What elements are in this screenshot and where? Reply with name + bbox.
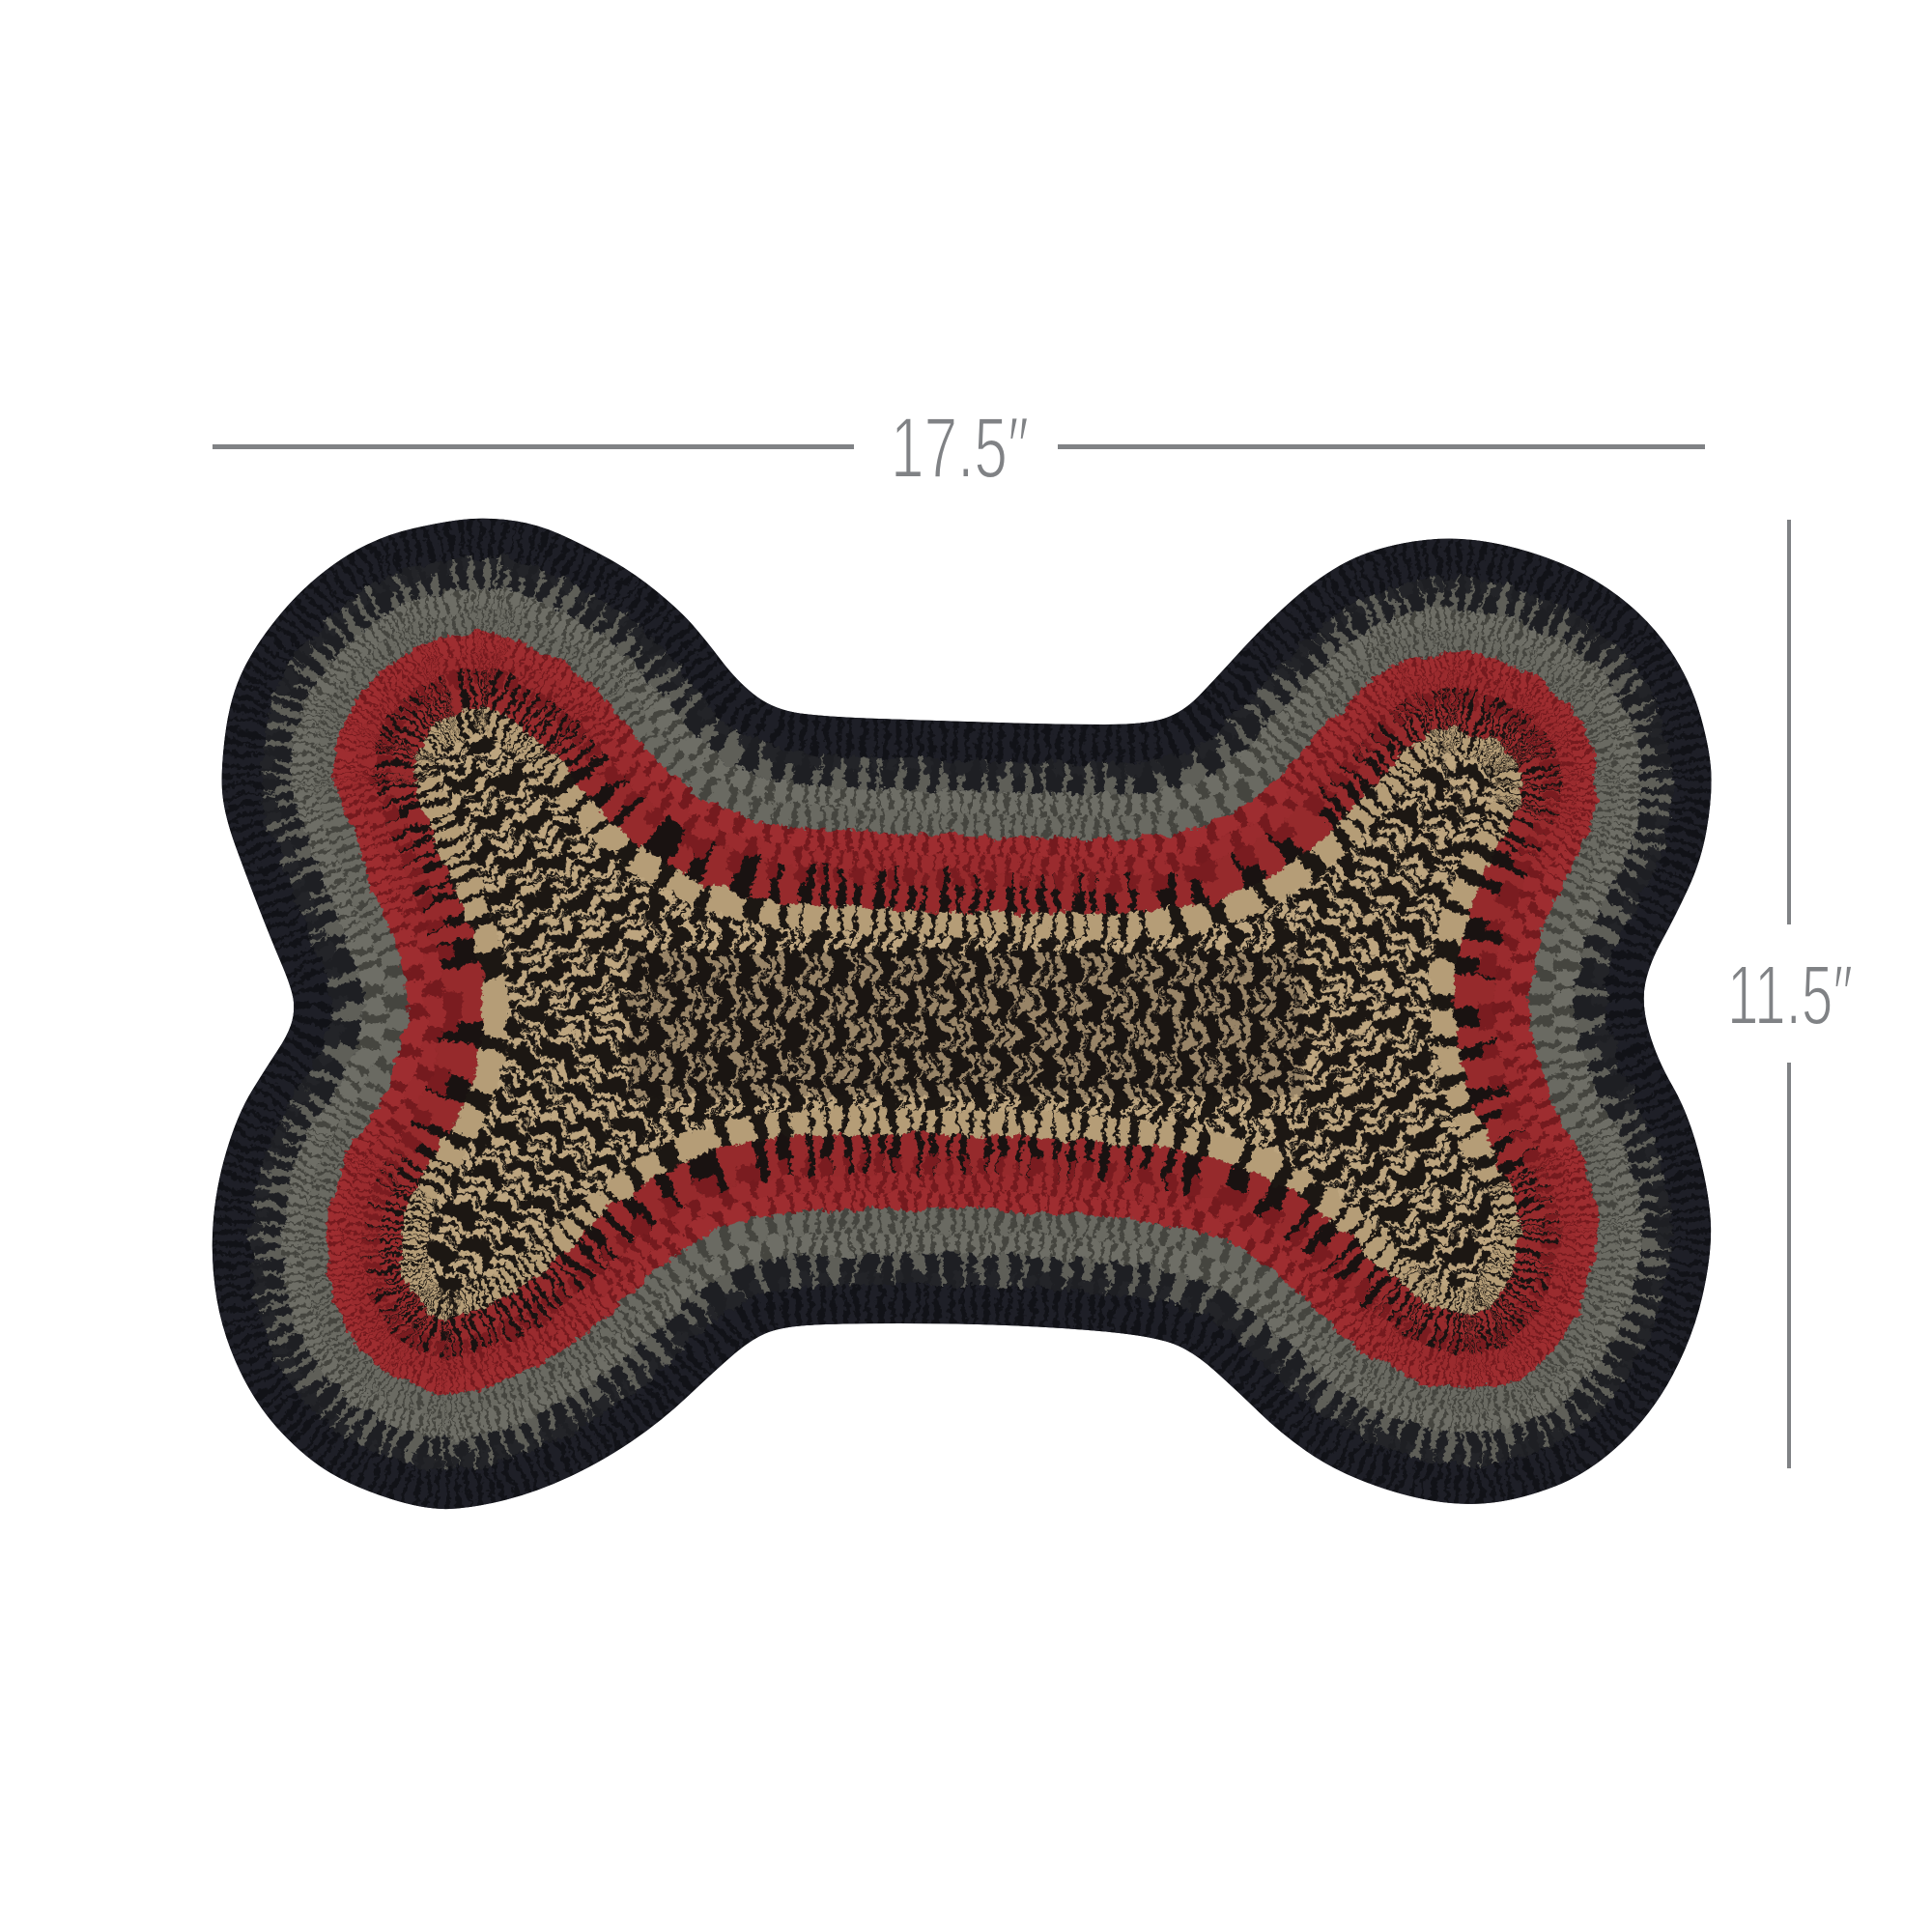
- dimension: height 11.5 inches: 11.5″: [1727, 949, 1853, 1042]
- rug yarn layers with woven distortion: [213, 518, 1712, 1509]
- infographic: braided bone rug with dimensions: [213, 418, 1851, 1509]
- band: gray braid: [278, 585, 1646, 1443]
- band: red and black braid: [359, 667, 1564, 1361]
- band: black outer braid: [213, 519, 1712, 1509]
- braided bone rug: [213, 518, 1712, 1509]
- dimension: width 17.5 inches: 17.5″: [891, 399, 1029, 496]
- dimension: width 17.5 inches: [213, 399, 1705, 496]
- dimension: height 11.5 inches: [1727, 520, 1853, 1468]
- band: charcoal and gray braid: [245, 553, 1675, 1472]
- band: solid red braid: [325, 628, 1600, 1396]
- center braid: tan and black herringbone: [398, 704, 1523, 1321]
